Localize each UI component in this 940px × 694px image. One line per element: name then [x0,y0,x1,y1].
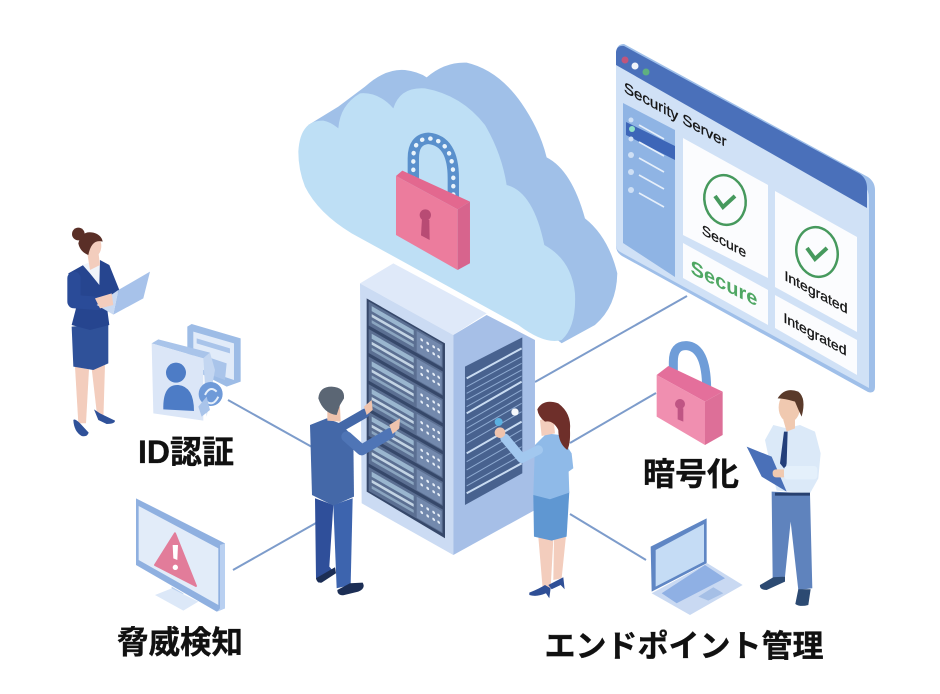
label: 脅威検知: 脅威検知 [117,624,243,660]
label: 暗号化: 暗号化 [643,456,739,492]
label: エンドポイント管理: エンドポイント管理 [544,629,824,664]
sidebar [623,103,675,277]
card: secure status: Secure [702,222,746,262]
window buttons [622,56,650,76]
card: integrated status: Integrated [785,268,847,318]
card: secure label [683,243,768,325]
person: woman at server [495,402,573,598]
server body [360,263,535,555]
window title: Security Server [624,79,727,151]
label: ID認証: ID認証 [138,434,234,470]
card: integrated label: Integrated [784,310,846,360]
window frame [616,44,875,392]
card: secure status [683,138,768,278]
window panel [616,52,869,388]
server rack [360,263,535,555]
cloud front [298,88,575,341]
person: woman with laptop [68,228,150,436]
person: man at server [310,387,400,595]
icon: ID documents [152,324,241,421]
icon: laptop [651,518,743,615]
front server units [369,301,443,534]
cloud with padlock [298,63,617,343]
dashboard window [616,44,875,392]
icon: warning monitor [136,498,225,612]
card: integrated label [775,295,857,375]
icon: encryption padlock [657,346,723,445]
card: secure label: Secure [691,256,758,311]
cloud back [308,63,617,343]
person: man with clipboard [747,390,821,606]
card: integrated status [775,191,857,332]
side vent lines [467,348,522,493]
connector lines [228,296,687,570]
padlock in cloud [396,138,470,270]
title bar [616,46,867,208]
